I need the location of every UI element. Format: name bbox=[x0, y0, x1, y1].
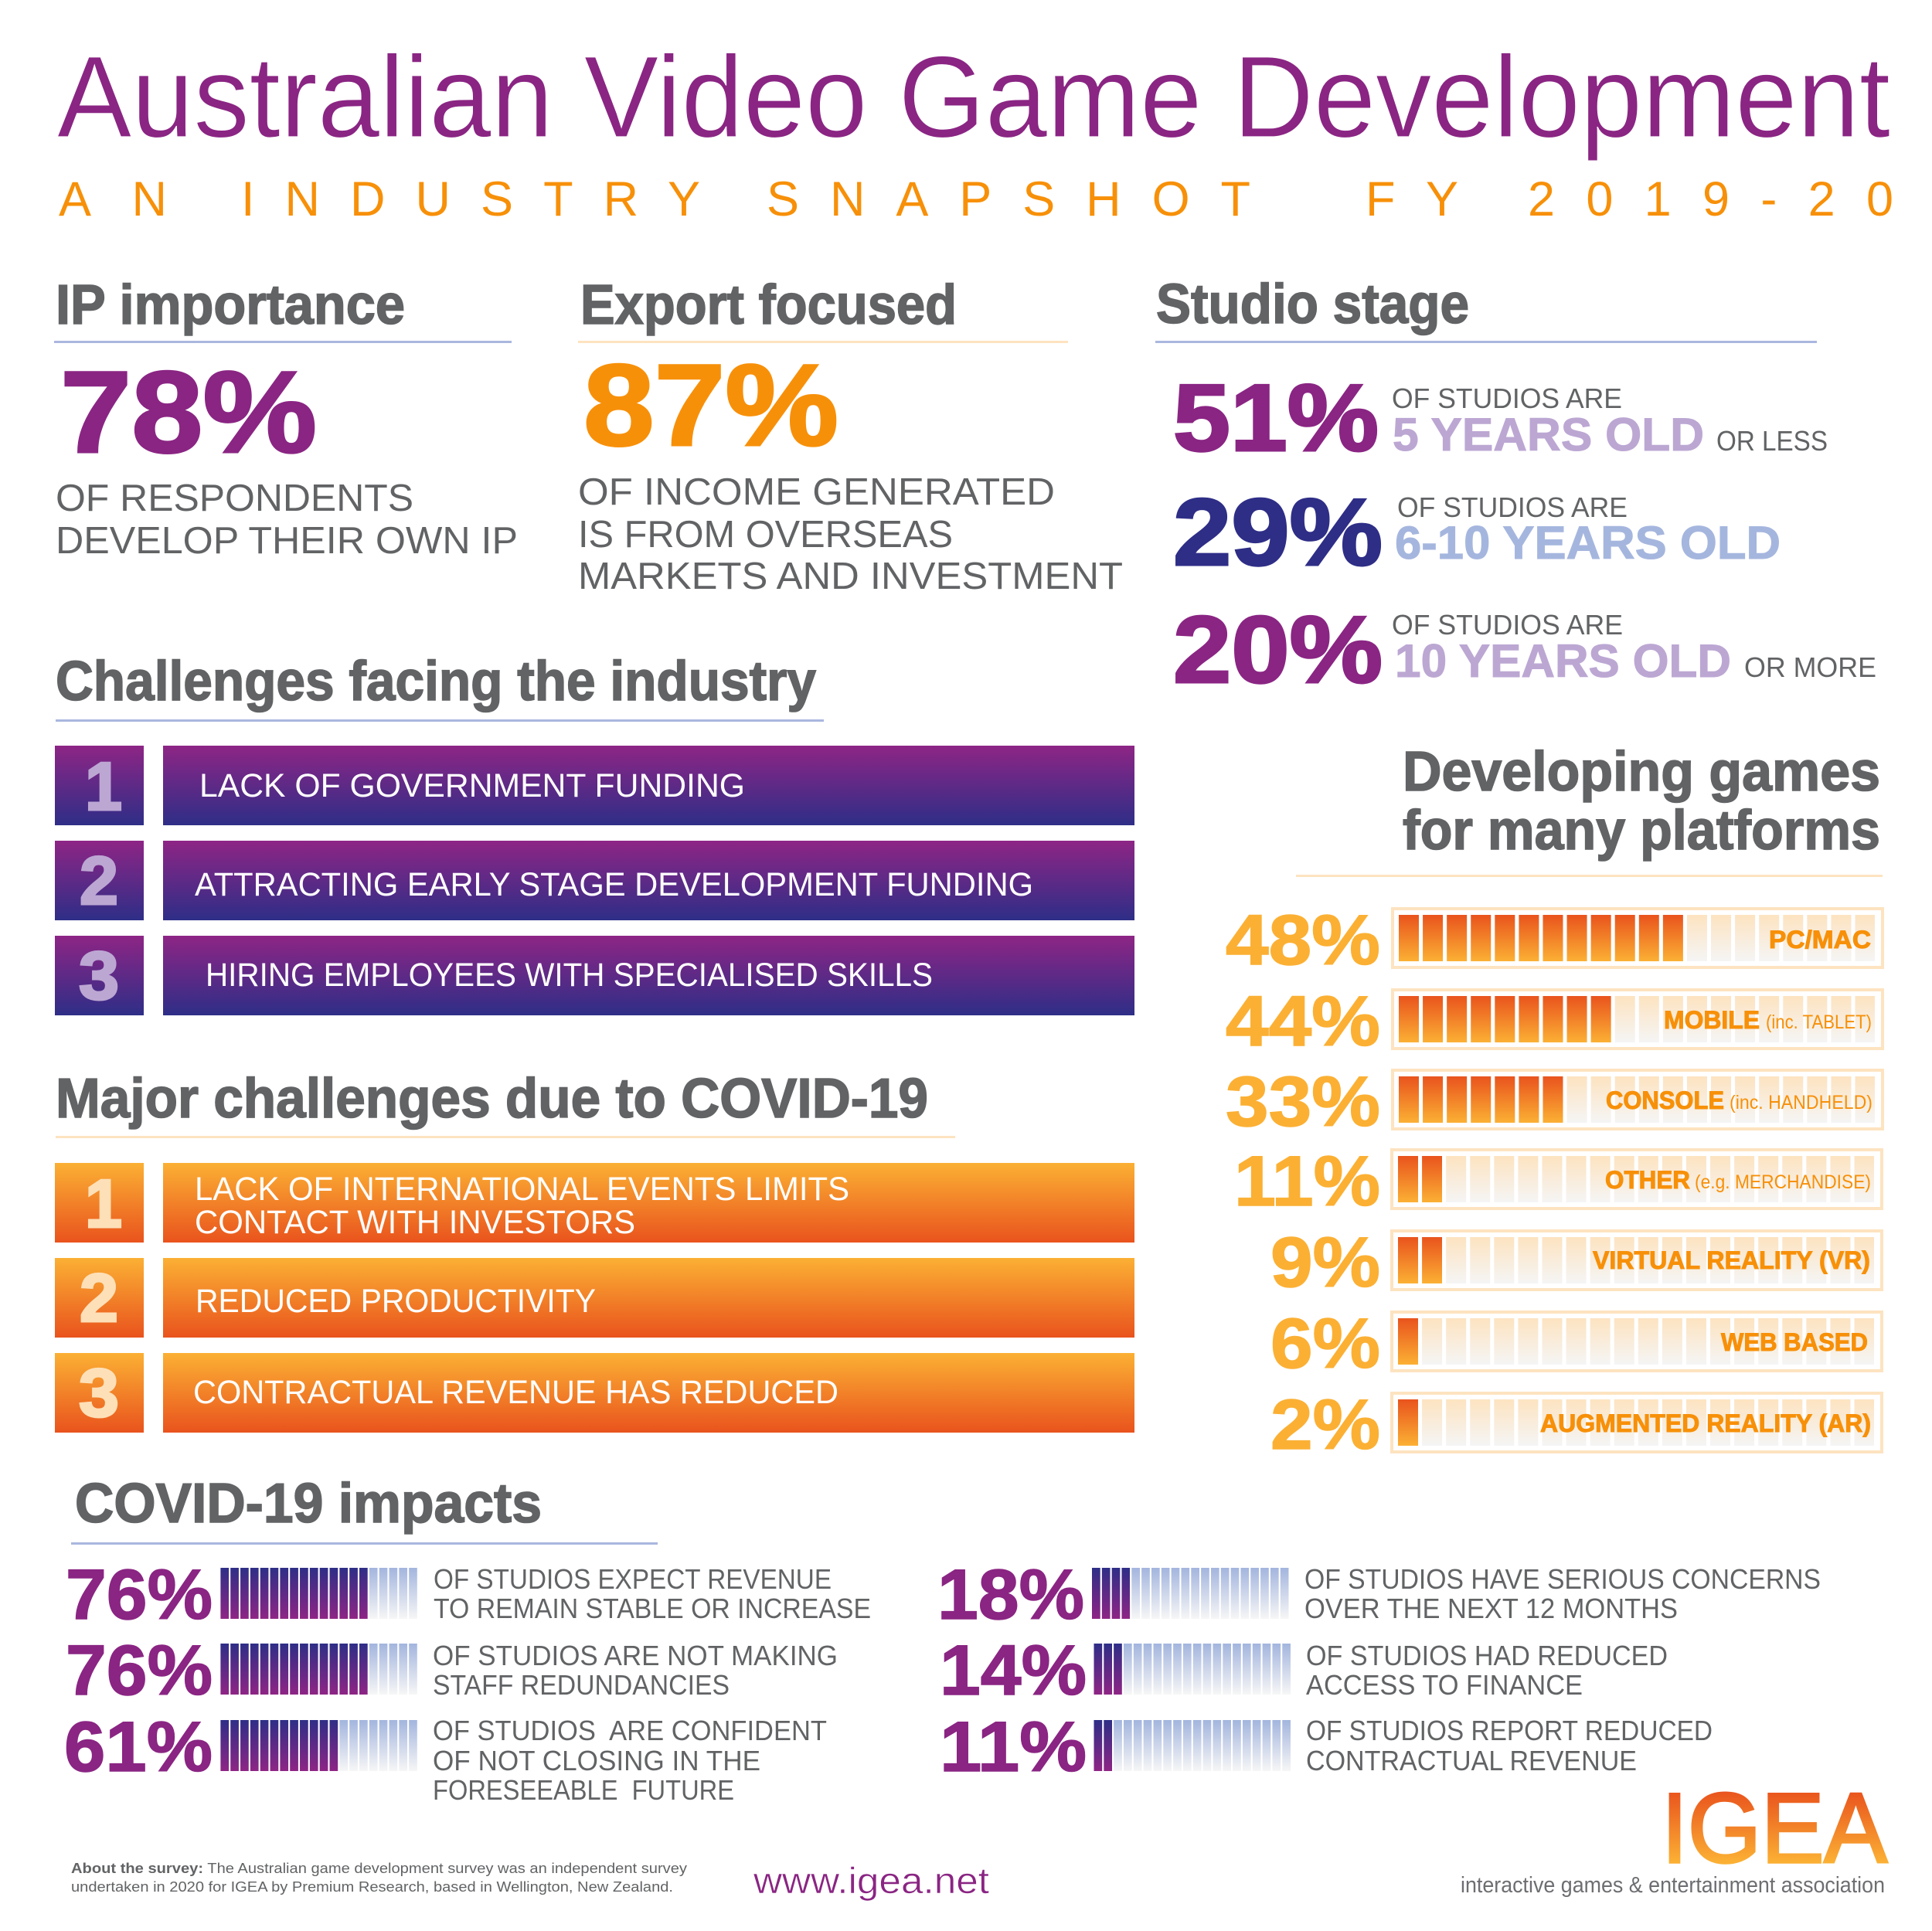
subtitle bbox=[59, 172, 1893, 226]
heading: Export focused: Export focused bbox=[580, 274, 957, 336]
bar: AR 2%: 2% bbox=[1270, 1385, 1380, 1464]
covid challenge 1: 1 bbox=[85, 1165, 122, 1242]
bar: Console 33% bbox=[1226, 1062, 1883, 1141]
bar: VR 9%: VIRTUAL REALITY (VR) bbox=[1593, 1246, 1870, 1274]
impact: 76% revenue: 76% bbox=[66, 1555, 213, 1634]
impact: 18% concerns: 18% bbox=[937, 1555, 1084, 1634]
impact: 11% revenue: 11% bbox=[940, 1708, 1087, 1787]
impact: 76% revenue: TO REMAIN STABLE OR INCREASE bbox=[434, 1593, 871, 1624]
impact: 14% finance: OF STUDIOS HAD REDUCED bbox=[1306, 1640, 1668, 1671]
heading: Major challenges: Major challenges due to COVID-19 bbox=[56, 1068, 928, 1130]
panel: Developing games for many platforms: for many platforms bbox=[1403, 800, 1880, 862]
impact: 14% finance: 14% bbox=[940, 1631, 1087, 1710]
covid challenge 1: CONTACT WITH INVESTORS bbox=[195, 1204, 635, 1241]
subtitle: FY bbox=[1366, 172, 1458, 226]
row: 20%: 20% bbox=[1173, 597, 1383, 703]
bar: Mobile 44% bbox=[1226, 982, 1883, 1061]
footer: about the survey bbox=[71, 1861, 687, 1895]
logo: IGEA: IGEA bbox=[1662, 1773, 1888, 1884]
challenge 2 bbox=[55, 841, 1134, 920]
text: develop own IP: DEVELOP THEIR OWN IP bbox=[56, 520, 518, 562]
bar: VR 9%: 9% bbox=[1270, 1223, 1380, 1302]
impact: 76% redundancies: OF STUDIOS ARE NOT MAKING bbox=[433, 1640, 838, 1671]
text: overseas income: IS FROM OVERSEAS bbox=[578, 514, 953, 556]
bar: Console 33%: CONSOLE bbox=[1606, 1086, 1724, 1114]
row: 29% bbox=[1173, 480, 1781, 586]
impact: 76% redundancies bbox=[66, 1631, 838, 1710]
row: 51%: 51% bbox=[1173, 365, 1379, 471]
row: 20% bbox=[1173, 597, 1876, 703]
subtitle: 2019-20 bbox=[1528, 172, 1893, 226]
challenge 1 bbox=[55, 746, 1134, 825]
heading: IP importance: IP importance bbox=[56, 274, 405, 336]
impact: 61% confident bbox=[64, 1708, 827, 1806]
bar: Mobile 44%: MOBILE bbox=[1664, 1006, 1760, 1034]
row: 20%: OF STUDIOS ARE bbox=[1392, 609, 1623, 641]
row: 20%: OR MORE bbox=[1744, 651, 1876, 683]
bar: Other 11%: (e.g. MERCHANDISE) bbox=[1695, 1171, 1871, 1193]
row: 51%: OR LESS bbox=[1716, 425, 1828, 457]
bar: Console 33%: (inc. HANDHELD) bbox=[1730, 1092, 1872, 1113]
row: 51%: OF STUDIOS ARE bbox=[1392, 382, 1622, 414]
bar: VR 9% bbox=[1270, 1223, 1882, 1302]
title: Australian Video Game Development bbox=[57, 32, 1890, 161]
covid challenge 2: 2 bbox=[80, 1260, 118, 1336]
impact: 61% confident: OF NOT CLOSING IN THE bbox=[433, 1745, 760, 1776]
impact: 11% revenue: CONTRACTUAL REVENUE bbox=[1306, 1745, 1637, 1776]
impact: 18% concerns: OF STUDIOS HAVE SERIOUS CONCERNS bbox=[1304, 1563, 1821, 1595]
impact: 18% concerns bbox=[937, 1555, 1821, 1634]
row: 51%: 5 YEARS OLD bbox=[1393, 409, 1704, 461]
challenge 2: 2 bbox=[80, 842, 118, 919]
panel: Challenges facing the industry bbox=[55, 651, 1134, 1015]
row: 29%: 6-10 YEARS OLD bbox=[1395, 517, 1781, 569]
impact: 18% concerns: OVER THE NEXT 12 MONTHS bbox=[1304, 1593, 1678, 1624]
text: overseas income: OF INCOME GENERATED bbox=[578, 471, 1055, 513]
impact: 14% finance: ACCESS TO FINANCE bbox=[1306, 1669, 1583, 1701]
covid challenge 3 bbox=[55, 1353, 1134, 1433]
subtitle: SNAPSHOT bbox=[767, 172, 1250, 226]
panel: Export focused bbox=[578, 274, 1123, 597]
bar: PC/MAC 48% bbox=[1226, 901, 1883, 980]
bar: Other 11% bbox=[1234, 1142, 1882, 1221]
stat: 87%: 87% bbox=[583, 340, 838, 470]
covid challenge 3: 3 bbox=[79, 1355, 119, 1431]
heading: COVID-19 impacts: COVID-19 impacts bbox=[75, 1473, 542, 1535]
impact: 76% redundancies: STAFF REDUNDANCIES bbox=[433, 1669, 730, 1701]
impact: 61% confident: OF STUDIOS ARE CONFIDENT bbox=[433, 1715, 827, 1746]
bar: Web 6%: WEB BASED bbox=[1721, 1328, 1868, 1356]
subtitle: INDUSTRY bbox=[241, 172, 700, 226]
bar: AR 2% bbox=[1270, 1385, 1882, 1464]
challenge 1: 1 bbox=[85, 748, 122, 824]
impact: 11% revenue bbox=[940, 1708, 1713, 1787]
row: 20%: 10 YEARS OLD bbox=[1395, 635, 1731, 687]
covid challenge 3: CONTRACTUAL REVENUE HAS REDUCED bbox=[193, 1374, 838, 1411]
subtitle: AN bbox=[59, 172, 167, 226]
impact: 11% revenue: OF STUDIOS REPORT REDUCED bbox=[1306, 1715, 1713, 1746]
impact: 76% revenue: OF STUDIOS EXPECT REVENUE bbox=[434, 1563, 832, 1595]
challenge 3: HIRING EMPLOYEES WITH SPECIALISED SKILLS bbox=[206, 957, 933, 994]
challenge 3: 3 bbox=[79, 937, 119, 1014]
heading: Challenges: Challenges facing the industry bbox=[56, 651, 816, 712]
bar: PC/MAC 48%: PC/MAC bbox=[1769, 926, 1871, 954]
panel: IP importance bbox=[54, 274, 518, 562]
bar: Mobile 44%: 44% bbox=[1226, 982, 1380, 1061]
row: 51% bbox=[1173, 365, 1828, 471]
panel: Major challenges due to COVID-19 bbox=[55, 1068, 1134, 1433]
row: 29%: 29% bbox=[1173, 480, 1383, 586]
covid challenge 1: LACK OF INTERNATIONAL EVENTS LIMITS bbox=[195, 1171, 849, 1208]
impact: 76% revenue bbox=[66, 1555, 871, 1634]
bar: Console 33%: 33% bbox=[1226, 1062, 1380, 1141]
challenge 1: LACK OF GOVERNMENT FUNDING bbox=[199, 767, 745, 804]
covid challenge 2 bbox=[55, 1258, 1134, 1338]
heading: Studio stage: Studio stage bbox=[1156, 274, 1469, 335]
bar: Mobile 44%: (inc. TABLET) bbox=[1766, 1011, 1872, 1033]
bar: Web 6% bbox=[1270, 1304, 1882, 1383]
impact: 14% finance bbox=[940, 1631, 1668, 1710]
impact: 61% confident: FORESEEABLE FUTURE bbox=[433, 1774, 734, 1806]
bar: AR 2%: AUGMENTED REALITY (AR) bbox=[1540, 1409, 1871, 1437]
bar: Other 11%: OTHER bbox=[1605, 1166, 1690, 1194]
bar: PC/MAC 48%: 48% bbox=[1226, 901, 1380, 980]
impact: 76% redundancies: 76% bbox=[66, 1631, 213, 1710]
stat: 78%: 78% bbox=[60, 347, 317, 477]
covid challenge 2: REDUCED PRODUCTIVITY bbox=[196, 1283, 596, 1320]
footer: about the survey: About the survey: The Australian game development survey was an independent survey bbox=[71, 1861, 687, 1876]
panel: Developing games for many platforms bbox=[1226, 741, 1883, 1464]
challenge 3 bbox=[55, 936, 1134, 1015]
footer: about the survey: undertaken in 2020 for IGEA by Premium Research, based in Wellington, New Zealand. bbox=[71, 1879, 673, 1895]
text: develop own IP: OF RESPONDENTS bbox=[56, 478, 413, 519]
row: 29%: OF STUDIOS ARE bbox=[1397, 491, 1628, 523]
footer: website: www.igea.net bbox=[753, 1860, 989, 1901]
bar: Web 6%: 6% bbox=[1270, 1304, 1380, 1383]
text: develop own IP bbox=[56, 478, 518, 562]
panel: Studio stage bbox=[1155, 274, 1876, 703]
covid challenge 1 bbox=[55, 1163, 1134, 1243]
logo tagline: interactive games & entertainment association bbox=[1461, 1873, 1885, 1898]
panel: COVID-19 impacts bbox=[64, 1473, 1821, 1806]
heading: Developing games: Developing games bbox=[1403, 741, 1880, 803]
text: overseas income bbox=[578, 471, 1123, 597]
impact: 61% confident: 61% bbox=[64, 1708, 213, 1787]
bar: Other 11%: 11% bbox=[1234, 1142, 1380, 1221]
text: overseas income: MARKETS AND INVESTMENT bbox=[578, 556, 1123, 597]
challenge 2: ATTRACTING EARLY STAGE DEVELOPMENT FUNDING bbox=[195, 866, 1033, 903]
